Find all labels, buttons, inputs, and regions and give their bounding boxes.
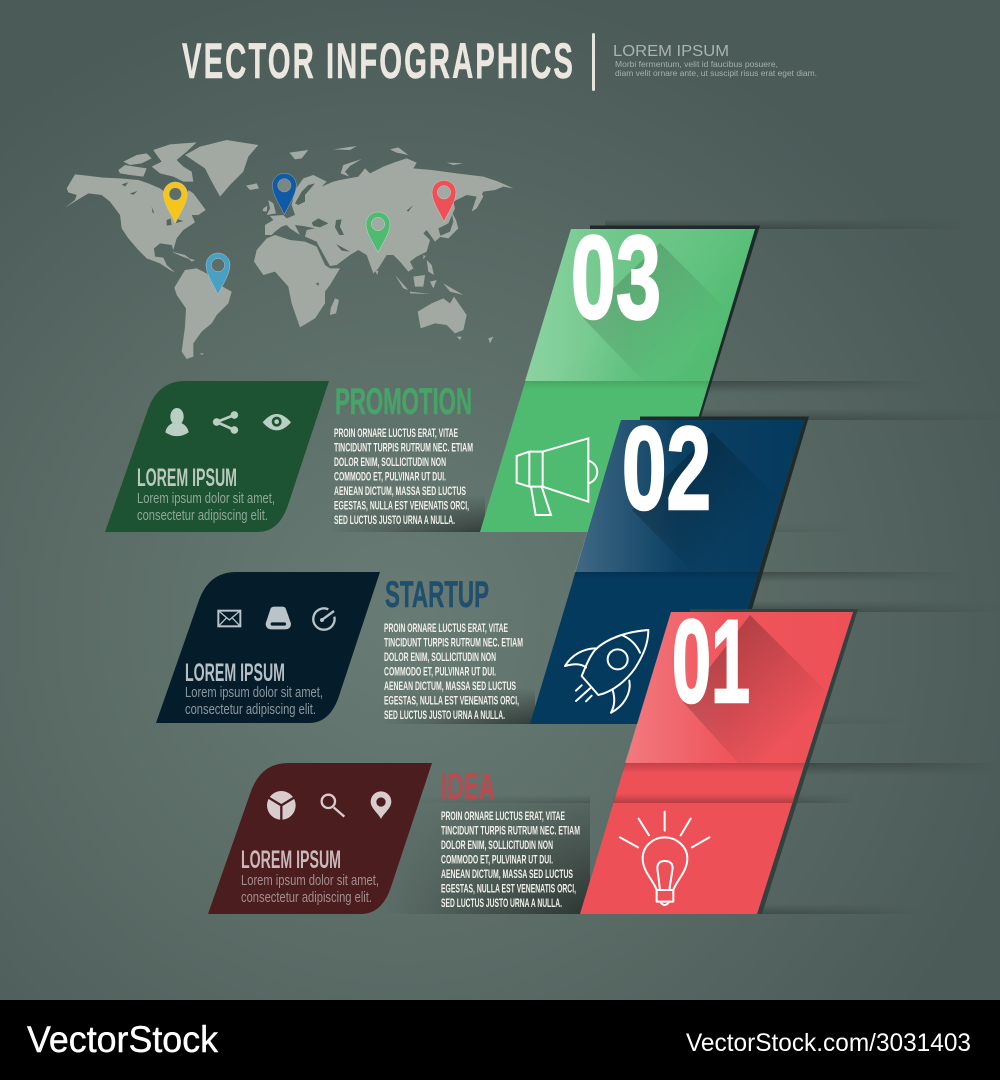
card description: Lorem ipsum dolor sit amet, [185, 685, 323, 701]
title divider [592, 33, 595, 91]
body text: promotion: EGESTAS, NULLA EST VENENATIS ORCI, [334, 500, 469, 512]
pin: red [432, 180, 456, 222]
card label: LOREM IPSUM [185, 659, 285, 687]
long shadow 02 [632, 432, 753, 553]
footer bar [0, 1000, 1000, 1080]
body text: promotion [334, 428, 473, 527]
Old World [254, 146, 513, 343]
title: VECTOR INFOGRAPHICS [182, 33, 575, 89]
subtitle block: Morbi fermentum, velit id faucibus posuere, [615, 60, 778, 69]
band: green 03 [480, 226, 760, 532]
icon: magnifier [322, 795, 344, 817]
body text: idea: EGESTAS, NULLA EST VENENATIS ORCI, [441, 884, 576, 896]
pin: teal [206, 253, 230, 295]
icon: drive [266, 607, 291, 629]
body text: promotion: DOLOR ENIM, SOLLICITUDIN NON [334, 457, 446, 469]
subtitle block [613, 43, 817, 78]
card description: consectetur adipiscing elit. [241, 890, 372, 906]
icon: person [165, 408, 189, 436]
heading: idea: IDEA [441, 766, 495, 807]
card description: consectetur adipiscing elit. [137, 508, 268, 524]
card label: LOREM IPSUM [137, 464, 237, 492]
icon: gauge [313, 608, 335, 630]
heading: promotion: PROMOTION [335, 381, 472, 422]
body text: startup: COMMODO ET, PULVINAR UT DUI. [384, 666, 496, 678]
panel: green card [105, 381, 329, 532]
body text: idea: AENEAN DICTUM, MASSA SED LUCTUS [441, 869, 573, 881]
card description [185, 685, 323, 718]
body text: idea: SED LUCTUS JUSTO URNA A NULLA. [441, 898, 562, 910]
band: navy 02 [530, 416, 809, 724]
number 02: 02 [622, 403, 711, 535]
body text: promotion: COMMODO ET, PULVINAR UT DUI. [334, 472, 446, 484]
body text: idea: DOLOR ENIM, SOLLICITUDIN NON [441, 840, 553, 852]
pin: yellow [163, 182, 187, 223]
long shadow 03 [583, 243, 708, 368]
Americas and Greenland [65, 140, 259, 359]
body text: promotion: SED LUCTUS JUSTO URNA A NULLA. [334, 515, 455, 527]
icon: pie [267, 791, 296, 820]
body text: idea: PROIN ORNARE LUCTUS ERAT, VITAE [441, 811, 565, 823]
body text: idea: COMMODO ET, PULVINAR UT DUI. [441, 854, 553, 866]
card description: Lorem ipsum dolor sit amet, [241, 873, 379, 889]
band shadows [330, 219, 1000, 914]
body text: startup [384, 623, 523, 722]
body text: startup: PROIN ORNARE LUCTUS ERAT, VITAE [384, 623, 508, 635]
panel: navy card [156, 572, 380, 723]
body text: idea: TINCIDUNT TURPIS RUTRUM NEC. ETIAM [441, 826, 580, 838]
body text: promotion: PROIN ORNARE LUCTUS ERAT, VITAE [334, 428, 458, 440]
body text: idea [441, 811, 580, 910]
icon: share [213, 411, 238, 434]
body text: startup: TINCIDUNT TURPIS RUTRUM NEC. ETIAM [384, 638, 523, 650]
icon: location pin [371, 791, 391, 819]
panel: maroon card [208, 763, 432, 914]
long shadow 01 [683, 615, 820, 763]
icon: rocket [565, 630, 648, 713]
body text: promotion: TINCIDUNT TURPIS RUTRUM NEC. ETIAM [334, 442, 473, 454]
card description [137, 491, 275, 524]
number 03: 03 [571, 212, 661, 344]
band: red 01 [580, 609, 858, 914]
body text: promotion: AENEAN DICTUM, MASSA SED LUCTUS [334, 486, 466, 498]
heading: startup: STARTUP [385, 574, 489, 615]
world map [65, 140, 513, 359]
pin: blue [272, 173, 296, 215]
icon: light bulb [620, 812, 709, 905]
card description [241, 873, 379, 906]
body text: startup: DOLOR ENIM, SOLLICITUDIN NON [384, 652, 496, 664]
card label: LOREM IPSUM [241, 846, 341, 874]
pin: green [366, 212, 390, 253]
icon: megaphone [517, 438, 597, 515]
subtitle block: diam velit ornare ante, ut suscipit risus erat eget diam. [615, 69, 817, 78]
body text: startup: AENEAN DICTUM, MASSA SED LUCTUS [384, 681, 516, 693]
card description: consectetur adipiscing elit. [185, 702, 316, 718]
footer logo: VectorStock [27, 1019, 218, 1060]
number 01: 01 [672, 596, 750, 728]
subtitle block: LOREM IPSUM [613, 43, 729, 60]
body text: startup: EGESTAS, NULLA EST VENENATIS ORCI, [384, 696, 519, 708]
body text: startup: SED LUCTUS JUSTO URNA A NULLA. [384, 710, 505, 722]
footer url: VectorStock.com/3031403 [686, 1029, 971, 1057]
card description: Lorem ipsum dolor sit amet, [137, 491, 275, 507]
icon: envelope [218, 611, 240, 626]
icon: eye [263, 414, 291, 430]
